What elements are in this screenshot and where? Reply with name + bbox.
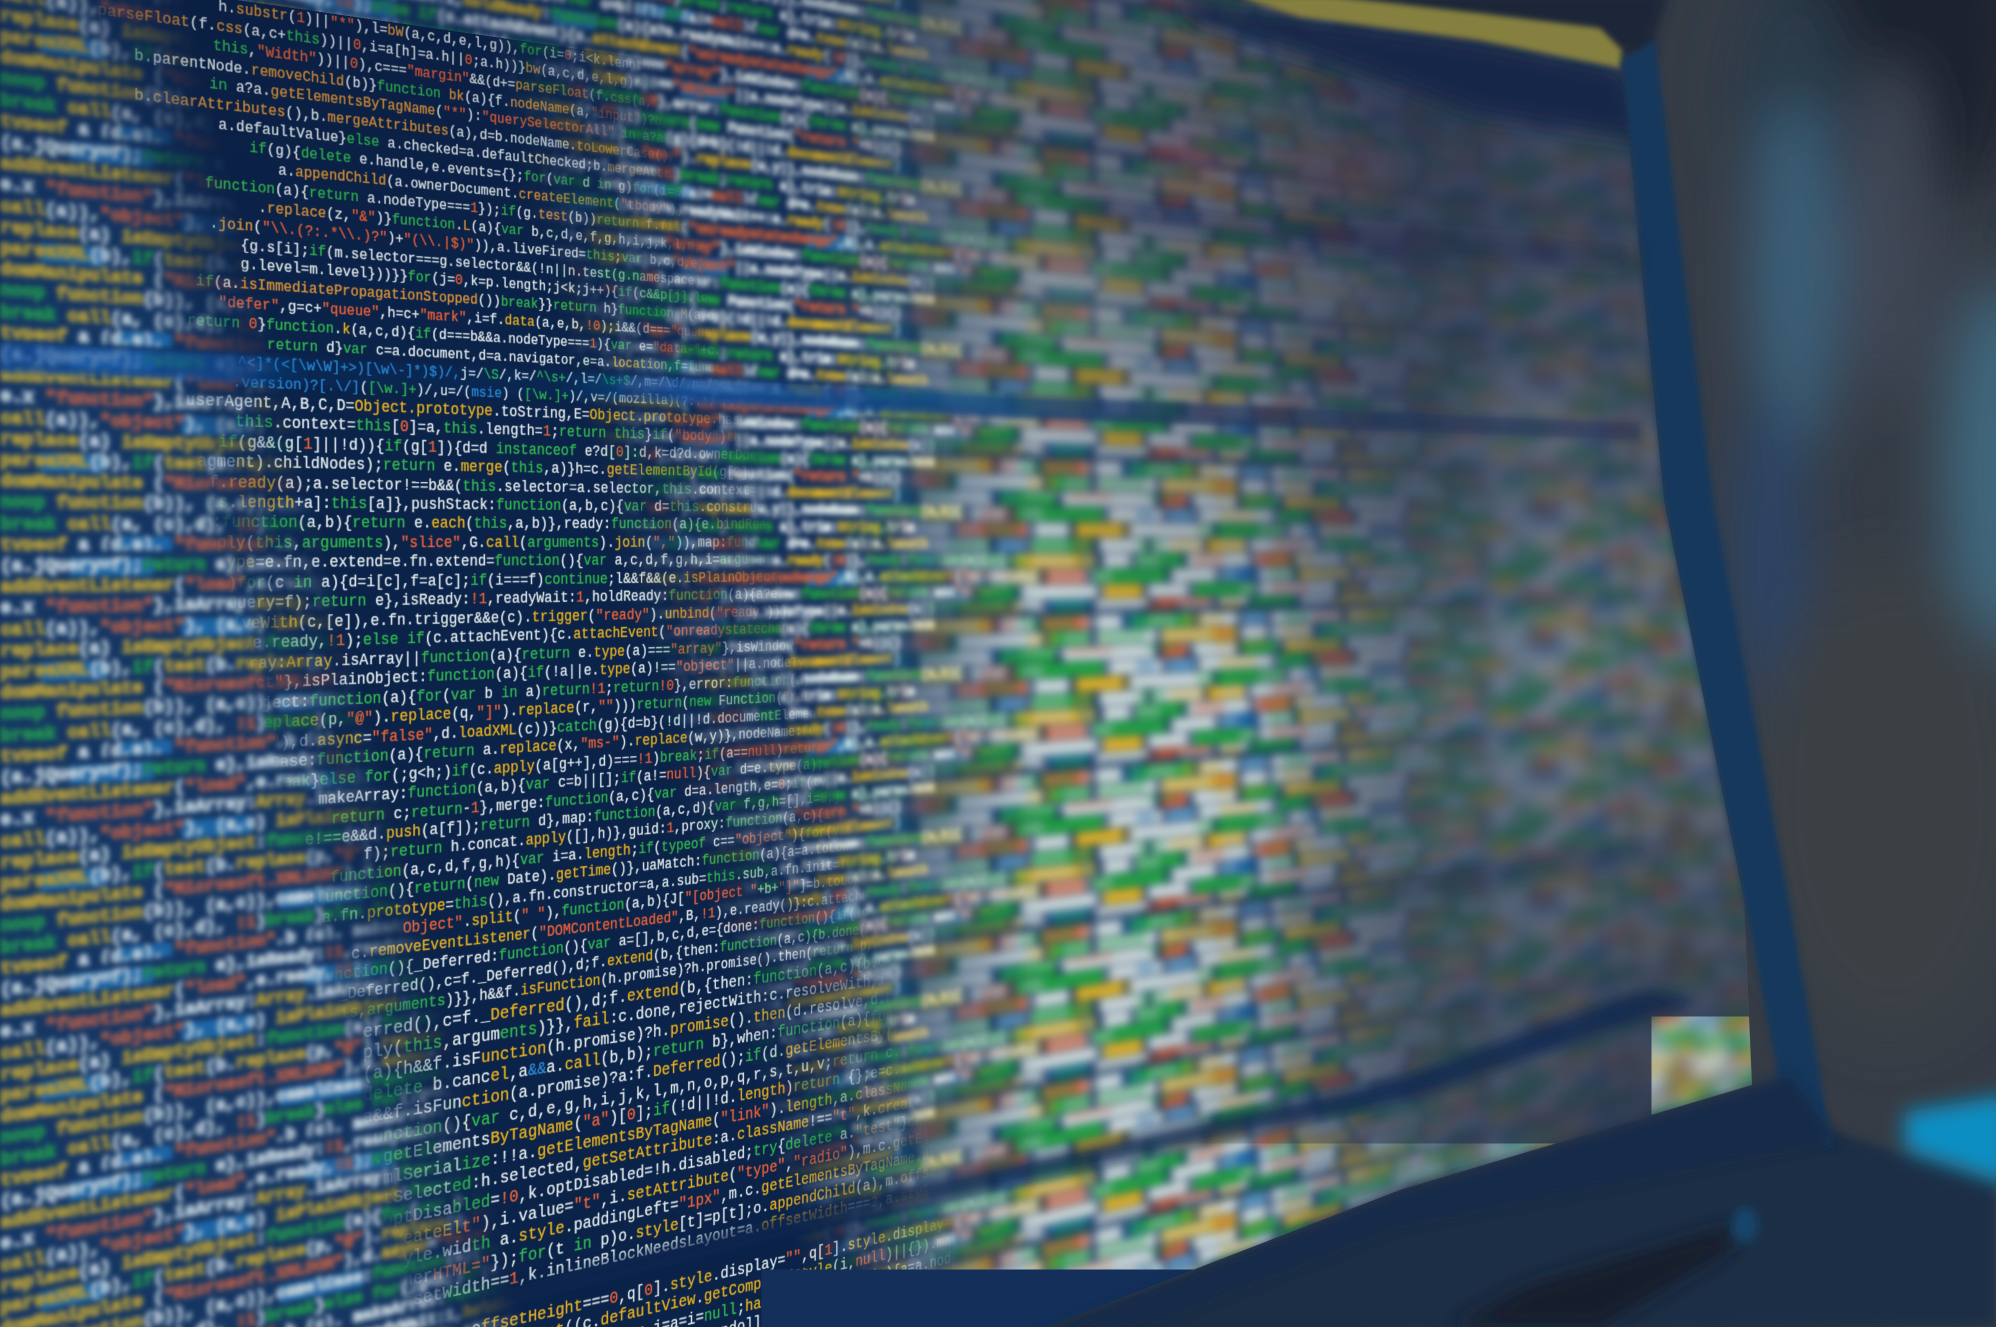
in-focus code text: _Deferred(),c=f._Deferred(),d;f.extend(b,{then:function(a,c){b.done(a) — [339, 921, 879, 1005]
in-focus code text: in a?a.getElementsByTagName("*"):"querySelectorAll" in a?a.querySelector — [209, 75, 757, 158]
in-focus code text: now:function(){return(new Date).getTime()},uaMatch:function(a){a=a.toLowerCase();var b= — [279, 830, 946, 912]
cyan reflection — [1905, 1095, 1996, 1185]
in-focus code text: ^<]*(<[\w\W]+>)[\w\-]*)$)/,j=/\S/,k=/^\s+/,l=/\s+$/,m=/\d/,n=/^<(\w+)\s*\/?> — [238, 354, 804, 397]
in-focus code text: a.fn.prototype=this(),a.fn.constructor=a,a.sub=this.sub,a.fn.init=function — [322, 852, 893, 928]
laptop base — [1000, 1130, 1996, 1327]
in-focus code text: function(a){return a.nodeType===1});if(g.test(b))return f.filter(b,d,!c); — [205, 174, 760, 243]
in-focus code text: Microsoft.XMLDOM"),d.async="false",d.loadXML(c))}catch(g){d=b}(!d||!d.documentElement)&&e — [115, 704, 850, 762]
in-focus code text: pushStack(G.apply(this,arguments),"slice",G.call(arguments).join(",")),map:function(a){return this. — [77, 534, 892, 554]
dark streak upper right — [1080, 198, 1630, 264]
in-focus code text: function(){var c,d,e,g,h,i,j,k,l,m,n,o,p,q,r,s,t,u,v;return c.length,h — [363, 1033, 952, 1151]
yellow strip — [1235, 0, 1622, 68]
dark gap near lower screen edge — [500, 990, 1700, 1308]
in-focus code text: {g.s[i];if(m.selector===g.selector&&(!n||n.test(g.namespace))&&!g.handler — [241, 236, 786, 295]
in-focus code text: c.removeEventListener("DOMContentLoaded",B,!1),e.ready()}:c.attachEvent&&(B= — [351, 882, 927, 964]
navy wedge under yellow strip — [1180, 0, 1650, 140]
in-focus code text: "object"},isPlainObject:function(a){if(!a||e.type(a)!=="object"||a.nodeType||e.isWindow — [208, 652, 899, 696]
in-focus code text: !1)break}else for(;g<h;)if(c.apply(a[g++],d)===!1)break;if(a==null)return c;var d — [235, 736, 878, 796]
in-focus code text: a&&f.isFunction(a.promise)?a:f.Deferred();if(d.getElementsBy(return — [363, 1019, 937, 1129]
in-focus code text: "load",e.ready,!1);else if(c.attachEvent){c.attachEvent("onreadystatechange",B),a.attachEvent — [185, 618, 922, 656]
in-focus code text: return d},each:function(a,b){return e.each(this,a,b)},ready:function(a){e.bindReady() — [72, 513, 794, 534]
dark region above yellow strip — [1225, 0, 1670, 55]
in-focus code text: g.level=m.level}))}}for(j=0,k=p.length;j<k;j++){if(c&&p[j].level>=c)break; — [241, 256, 793, 313]
in-focus code text: .replace(z,"&")}function.L(a){var b,c,d,e,f,g,h,i,j,k,l,m,n,o,p,q,r=[],s=[],t= — [258, 198, 831, 266]
in-focus code text: null)for(c in a){d=i[c],f=a[c];if(i===f)continue;l&&f&&(e.isPlainObject(f)||(g= — [189, 569, 833, 594]
in-focus code text: this,"Width"))||0),c==="margin"&&(d+=parseFloat(f.css(a,"margin"+this))||0) — [213, 36, 779, 127]
in-focus code text: this,arguments)}},h&&f.isFunction(h.promise)?h.promise().then(return b,when: — [322, 934, 906, 1027]
in-focus code text: .join("\\.(?:.*\\.)?")+"(\\.|$)")),a.liveFired=this;var b,c,d,e,f,g,h,i — [209, 214, 751, 276]
in-focus code text: Object".split(" "),function(a,b){J["[object "+b+"]"]=b.toLowerCase()}) — [403, 865, 926, 939]
dim colour blotches in upper right of screen — [1020, 89, 1590, 480]
in-focus code text: if(g&&(g[1]||!d)){if(g[1]){d=d instanceof e?d[0]:d,k=d?d.ownerDocument||d:c — [218, 433, 826, 466]
dark streak on base — [1450, 1225, 1735, 1327]
in-focus code text: this.context=this[0]=a,this.length=1;return this}if("body")this.selector,d.documentEle — [235, 413, 911, 451]
farthest defocused code — [1334, 56, 1752, 1198]
in-focus code text: return 0}function.k(a,c,d){if(d===b&&a.nodeType===1){var e="data-"+c.replace — [187, 311, 767, 361]
in-focus code text: d.userAgent,A,B,C,D=Object.prototype.toString,E=Object.prototype.hasOwnProperty,F= — [166, 390, 837, 432]
in-focus code text: function(){_Deferred:function(){var a=[],b,c,d,e={done:function(){if(!d){ — [316, 903, 882, 988]
in-focus code text: parseFloat(f.css(a,c+this))||0,i=a[h]=a.h||0;a.h))}bw(a,c,d,e,l,g)return e,f,g — [98, 0, 716, 101]
in-focus code text: b.clearAttributes(),b.mergeAttributes(a),d=b.nodeName.toLowerCase(),d==="object" — [134, 86, 755, 174]
near defocused code — [0, 0, 1030, 1327]
blue indicator light — [1732, 1207, 1758, 1243]
in-focus code text: d.getElementsByTagName("a")[0];if(!d||!d.length)return {};e=c.length — [363, 1054, 944, 1172]
far defocused code — [829, 0, 1475, 1327]
in-focus code text: if(a.isImmediatePropagationStopped())break}}return h}function M(a,c,d){ — [196, 272, 741, 326]
in-focus code text: return f.ready(a);a.selector!==b&&(this.selector=a.selector,this.context=a.context);return — [140, 472, 873, 501]
in-focus code text: "defer",g=c+"queue",h=c+"mark",i=f.data(a,e,b,!0);i&&(d==="queue"||!f.data — [218, 293, 777, 345]
in-focus code text: this this.length+a]:this[a]},pushStack:function(a,b,c){var d=this.constructor();e.isArray — [140, 493, 867, 517]
in-focus code text: ply(this,arguments)}},fail:c.done,rejectWith:c.resolveWith,isRejected: — [363, 961, 952, 1065]
in-focus code text: replace(p,"@").replace(q,"]").replace(r,"")))return(new Function("return "+b))() — [254, 686, 884, 734]
in-focus code text: makeArray:function(a,b){var c=b||[];if(a!=null){var d=e.type(a);a.length==null — [318, 750, 916, 810]
dark streak right middle — [1170, 850, 1650, 934]
blue highlight band — [0, 342, 1640, 440]
in-focus code text: k.optDisabled=!0,k.optDisabled=!h.disabled;try{delete a."test"}catch(s) — [363, 1104, 952, 1237]
in-focus code text: .version)?[.\/]([\w.]+)/,u=/(msie) ([\w.]+)/,v=/(mozilla)(?:.*? rv:([\w.]+))?/ — [233, 373, 812, 414]
in-focus code text: f);return h.concat.apply([],h)},guid:1,proxy:function(a,c){if(typeof c=="string" — [364, 796, 952, 865]
in-focus code text: (a.jQuery=f);return e},isReady:!1,readyWait:1,holdReady:function(a){a?e.readyWait++:e — [189, 586, 873, 615]
in-focus code text: a.defaultValue}else a.checked=a.defaultChecked;b.mergeAttributes&&(b.defaultChecked — [218, 116, 833, 200]
in-focus code text: b.parentNode.removeChild(b)}function bk(a){f.nodeName(a,"input")?bj(a):"getEl — [134, 46, 736, 138]
in-focus code text: e!==e&&d.push(a[f]);return d},map:function(a,c,d){var f,g,h=[],i=0,j=a.length — [305, 785, 900, 850]
in-focus code text: resolveWith(c,[e]),e.fn.trigger&&e(c).trigger("ready").unbind("ready")}},bindReady: — [193, 603, 863, 635]
in-focus code text: return c;return-1},merge:function(a,c){var d=a.length,e=0;if(typeof c.length — [331, 767, 912, 828]
in-focus code text: .fragment).childNodes);return e.merge(this,a)}h=c.getElementById(g[2]);if(h&& — [168, 452, 804, 483]
in-focus code text: function(a,c,d,f,g,h){var i=a.length;if(typeof c=="object"){for(var j in c) — [330, 818, 905, 888]
in-focus code text: return d}var c=a.document,d=a.navigator,e=a.location,f=function(){var e= — [267, 336, 799, 380]
in-focus code text: camelCase:function(a){return a.replace(x,"ms-").replace(w,y)},nodeName:function(a,b){ — [223, 719, 896, 776]
in-focus code text: a.appendChild(a.ownerDocument.createElement("tbody")):a}function bl(a,b){ — [278, 161, 814, 231]
in-focus code text: if(g){delete e.handle,e.events={};for(var d in g)for(i=0,h=g[d].length;i<h;i++) — [249, 139, 831, 216]
in-focus code text: fn.init.prototype=e.fn,e.extend=e.fn.extend=function(){var a,c,d,f,g,h,i=arguments[0]||{},j= — [87, 552, 852, 575]
in-focus code text: isArray:Array.isArray||function(a){return e.type(a)==="array"},isWindow:function(a){ — [210, 636, 881, 675]
right bezel — [1622, 40, 1833, 1150]
in-focus code text: isEmptyObject:function(a){for(var b in a)return!1;return!0},error:function(a){throw — [176, 670, 851, 718]
in-focus code text — [84, 0, 952, 1327]
bottom bezel — [1040, 1075, 1835, 1327]
